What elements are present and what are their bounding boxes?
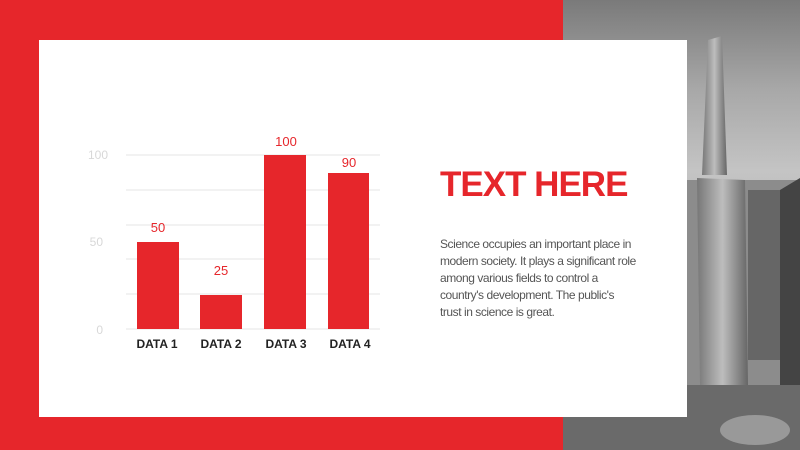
title: TEXT HERE bbox=[440, 165, 627, 204]
white panel bbox=[39, 40, 687, 417]
bar chart: DATA 3 bbox=[265, 337, 307, 351]
bar chart: DATA 4 bbox=[329, 337, 371, 351]
bar chart: 50 bbox=[90, 235, 103, 249]
body text: trust in science is great. bbox=[440, 305, 554, 319]
bar chart: 0 bbox=[96, 323, 103, 337]
bar chart: 25 bbox=[214, 263, 228, 278]
body text: modern society. It plays a significant role bbox=[440, 254, 636, 268]
bar chart: 50 bbox=[151, 220, 165, 235]
bar chart: 100 bbox=[88, 148, 108, 162]
bar chart: DATA 1 bbox=[136, 337, 178, 351]
bar chart: 100 bbox=[275, 134, 297, 149]
body text: Science occupies an important place in bbox=[440, 237, 631, 251]
bar chart: 90 bbox=[342, 155, 356, 170]
bar chart: DATA 2 bbox=[200, 337, 242, 351]
body text bbox=[440, 237, 636, 319]
body text: country's development. The public's bbox=[440, 288, 614, 302]
body text: among various fields to control a bbox=[440, 271, 598, 285]
photo: city skyline bbox=[563, 0, 800, 450]
